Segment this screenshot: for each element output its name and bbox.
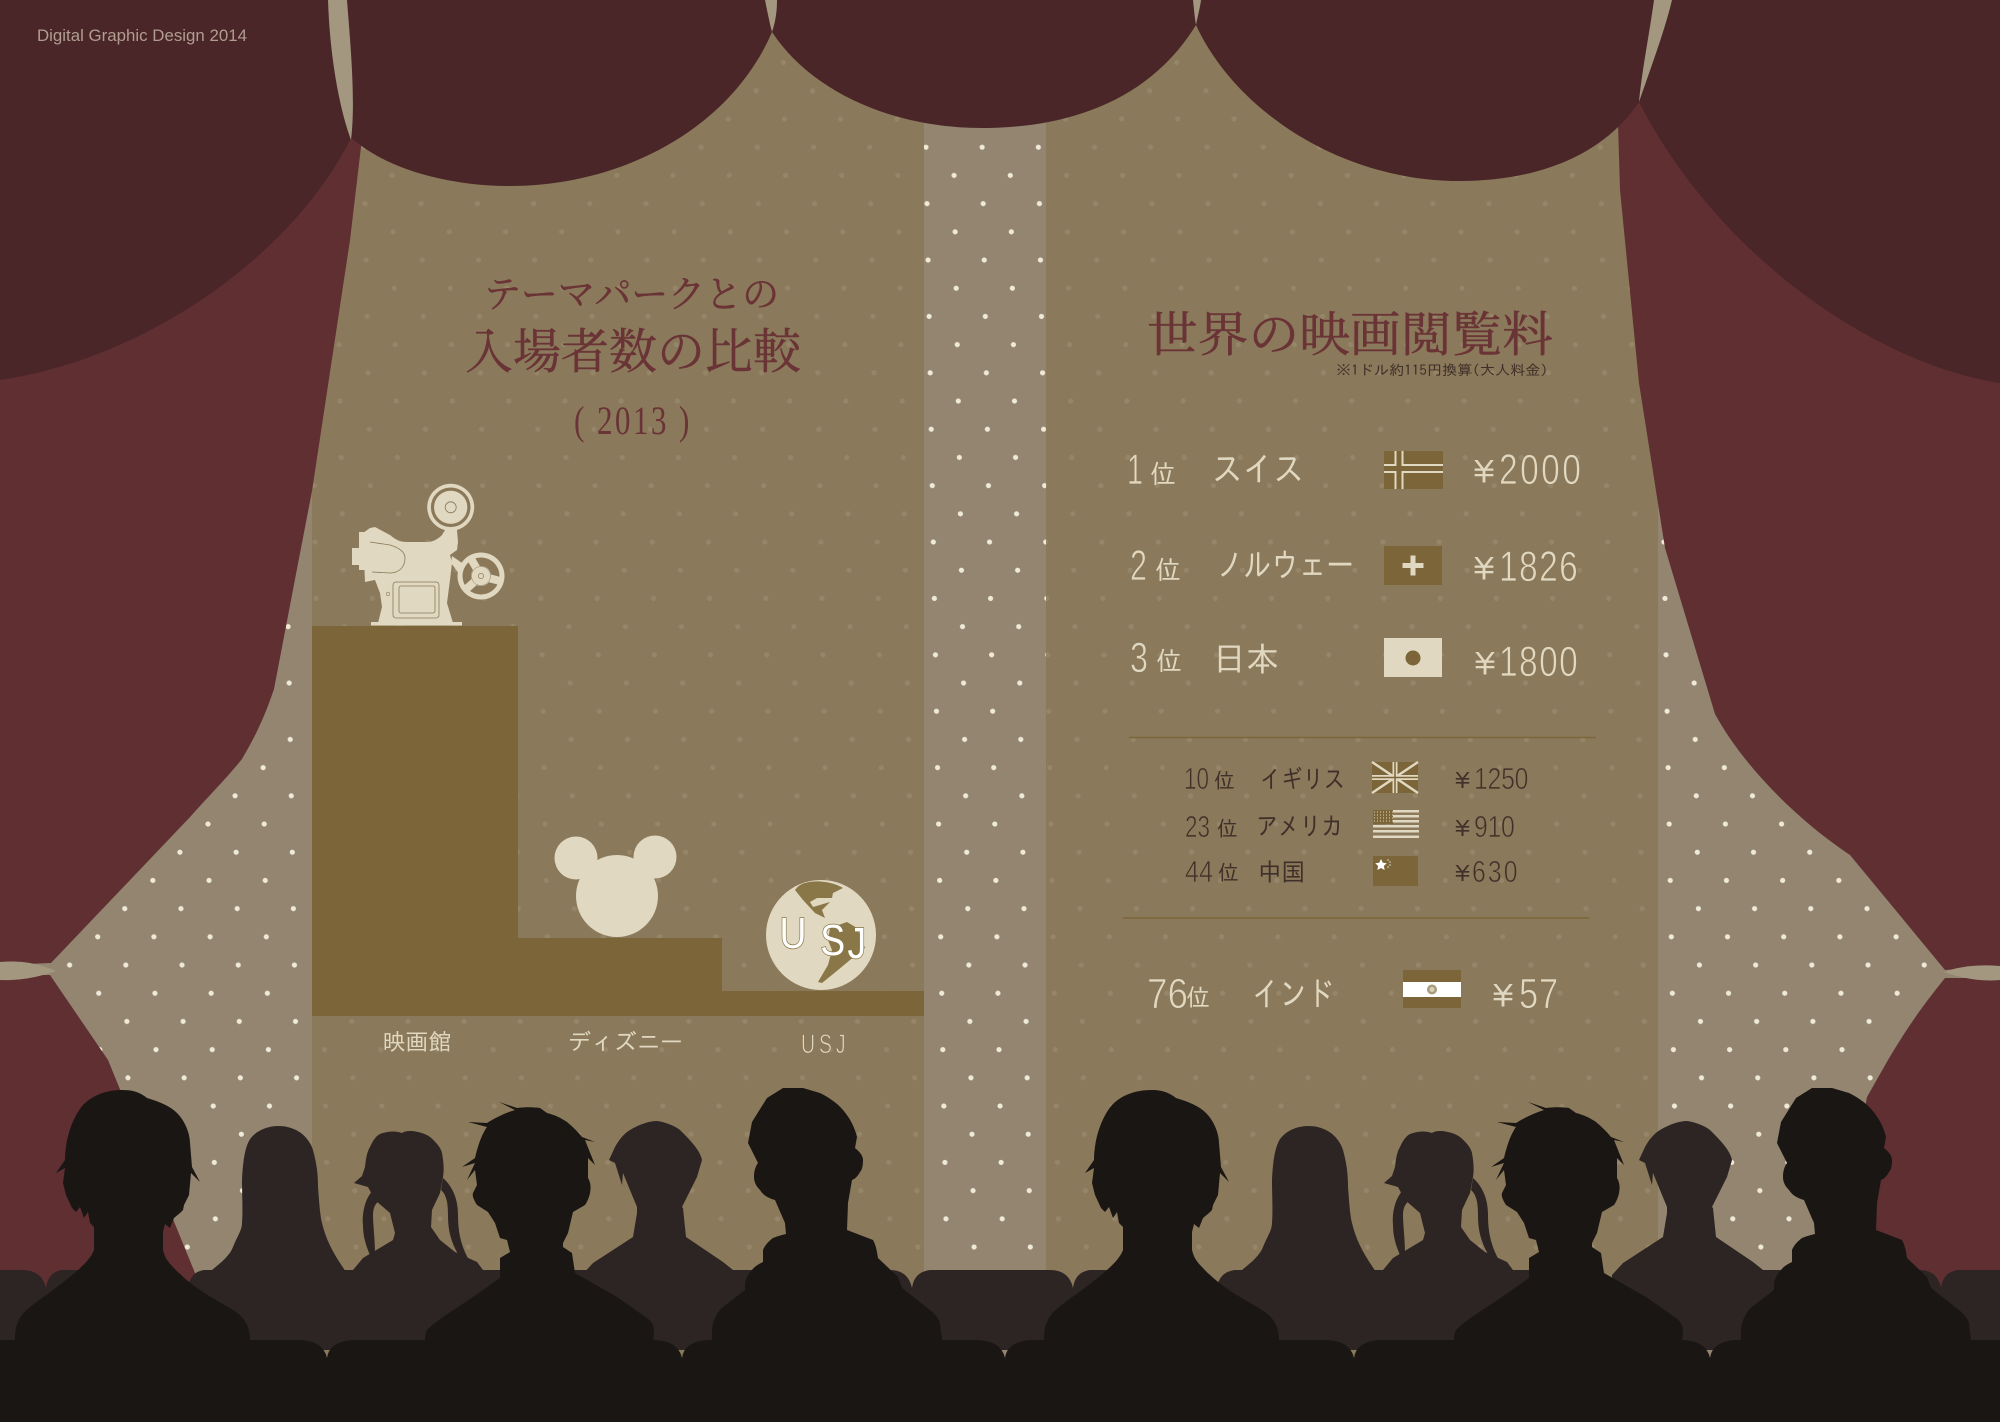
ranking row 76: India: 76 [1147,970,1188,1018]
ranking row 10: UK [1184,761,1528,796]
ranking row 3: Japan: 3 [1130,634,1148,682]
ranking row 3: Japan: 1800 [1499,638,1578,686]
curtain seam slivers [328,0,1672,140]
ranking row 2: Norway [1130,542,1578,591]
bar chart: attendance staircase [312,626,924,1016]
icon: USJ globe [766,880,876,990]
ranking row 10: UK: ￥ [1451,769,1474,792]
ranking row 76: India: ￥ [1487,980,1519,1012]
panel: right content panel [1046,0,1658,1422]
heading: right title: 世界の映画閲覧料 [1147,296,1553,365]
chart labels: 映画館 [383,1030,451,1053]
ranking row 10: UK: 位 [1214,770,1235,791]
ranking row 10: UK: イギリス [1260,766,1345,792]
chart labels: USJ [801,1029,846,1059]
heading: left title: ( 2013 ) [574,398,689,443]
ranking row 1: Switzerland [1127,446,1581,494]
ranking row 44: China [1185,854,1518,889]
audience: back row, right group [1235,1121,1763,1345]
credit text: Digital Graphic Design 2014 [37,27,247,45]
ranking row 1: Switzerland: ￥ [1468,456,1500,488]
ranking row 76: India: 57 [1519,970,1558,1018]
panel: left content panel [312,0,924,1422]
icon: USJ globe: USJ [779,908,866,968]
ranking row 10: UK: 10 [1184,761,1209,796]
heading: left title: テーマパークとの [484,264,779,318]
front row seats [0,1340,2000,1422]
ranking row 76: India [1147,970,1558,1018]
ranking row 2: Norway: ￥ [1468,553,1500,585]
ranking row 23: USA: 位 [1217,818,1238,839]
ranking row 23: USA: アメリカ [1256,814,1343,839]
ranking row 1: Switzerland: 1 [1127,446,1143,494]
ranking row 2: Norway: 位 [1155,557,1181,583]
ranking row 44: China: 44 [1185,854,1213,889]
ranking row 3: Japan: 日本 [1213,642,1279,676]
ranking row 1: Switzerland: 2000 [1499,446,1581,494]
ranking row 44: China: 630 [1472,854,1518,889]
ranking row 2: Norway: 2 [1130,542,1147,590]
footnote: ※1ドル約115円換算(大人料金) [1336,363,1548,377]
ranking row 23: USA: 910 [1474,809,1515,844]
ranking row 76: India: インド [1252,977,1334,1011]
icon: film projector [352,484,504,626]
chart labels [383,1029,846,1059]
audience: front row, right group [1044,1088,1971,1345]
ranking row 23: USA [1185,809,1515,844]
ranking row 2: Norway: 1826 [1499,543,1578,591]
chart labels: ディズニー [568,1030,683,1053]
ranking row 3: Japan: ￥ [1469,648,1501,680]
ranking row 10: UK: 1250 [1474,761,1528,796]
top valance curtain [0,0,2000,383]
ranking row 23: USA: 23 [1185,809,1210,844]
heading: left title [465,264,802,443]
ranking row 3: Japan: 位 [1156,648,1182,674]
ranking row 23: USA: ￥ [1451,817,1474,840]
left stage curtain [0,100,363,1300]
audience: back row, left group [205,1121,733,1345]
ranking row 3: Japan [1130,634,1578,686]
ranking row 1: Switzerland: 位 [1150,461,1176,487]
ranking row 1: Switzerland: スイス [1212,452,1304,486]
ranking row 44: China: 中国 [1258,860,1305,885]
audience: front row, left group [15,1088,942,1345]
heading: left title: 入場者数の比較 [465,313,802,382]
ranking row 76: India: 位 [1186,985,1210,1009]
icon: mouse silhouette [554,836,676,937]
ranking row 2: Norway: ノルウェー [1216,548,1354,582]
right stage curtain [1617,90,2000,1300]
ranking row 44: China: ￥ [1451,862,1474,885]
back row seats [0,1270,2000,1350]
ranking row 44: China: 位 [1218,862,1239,883]
